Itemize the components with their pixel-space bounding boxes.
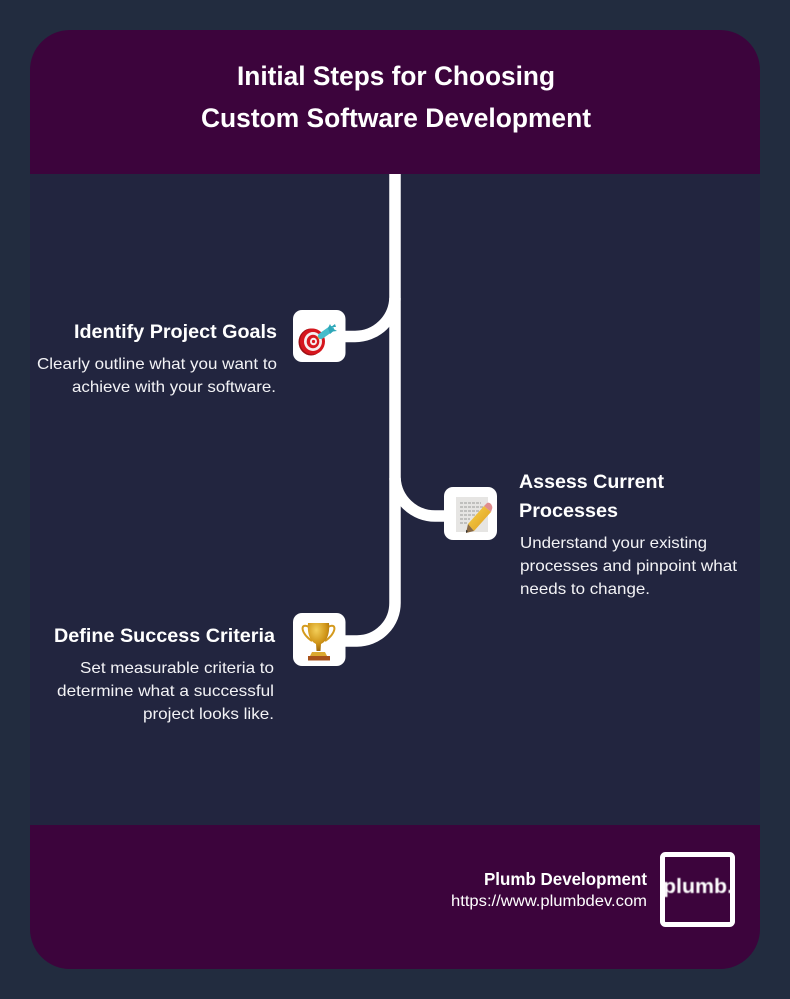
step 1: identify project goals xyxy=(37,310,346,396)
step 1 heading: Identify Project Goals xyxy=(74,322,277,343)
title: Initial Steps for Choosing xyxy=(237,61,555,91)
step 1 description xyxy=(37,356,277,396)
step 2: assess current processes xyxy=(444,472,738,598)
panel: header band xyxy=(30,30,760,174)
step 2 description xyxy=(520,535,738,598)
step 1 description: Clearly outline what you want to xyxy=(37,356,277,373)
logo: plumb: plumb. xyxy=(663,876,733,898)
step 3 description: determine what a successful xyxy=(57,683,274,700)
icon: memo with pencil xyxy=(444,487,497,540)
panel: body xyxy=(30,174,760,825)
step 2 description: processes and pinpoint what xyxy=(520,558,738,575)
footer text xyxy=(451,869,647,910)
step 2 description: Understand your existing xyxy=(520,535,707,552)
step 3 description: project looks like. xyxy=(143,706,274,723)
title: Custom Software Development xyxy=(201,103,591,133)
step 3: define success criteria xyxy=(54,613,346,723)
step 3 heading: Define Success Criteria xyxy=(54,626,275,647)
step 2 description: needs to change. xyxy=(520,581,650,598)
logo: plumb xyxy=(662,854,733,924)
icon: target with dart xyxy=(293,310,346,362)
panel: footer band xyxy=(30,825,760,969)
step 2 heading xyxy=(519,472,665,522)
footer text: Plumb Development xyxy=(484,869,647,889)
step 3 description xyxy=(57,660,274,723)
step 3 description: Set measurable criteria to xyxy=(80,660,274,677)
step 1 description: achieve with your software. xyxy=(72,379,276,396)
title xyxy=(201,61,591,133)
step 2 heading: Assess Current xyxy=(519,472,665,493)
step 2 heading: Processes xyxy=(519,501,618,522)
timeline connector xyxy=(340,174,450,641)
icon: trophy xyxy=(293,613,346,666)
footer text: https://www.plumbdev.com xyxy=(451,893,647,910)
